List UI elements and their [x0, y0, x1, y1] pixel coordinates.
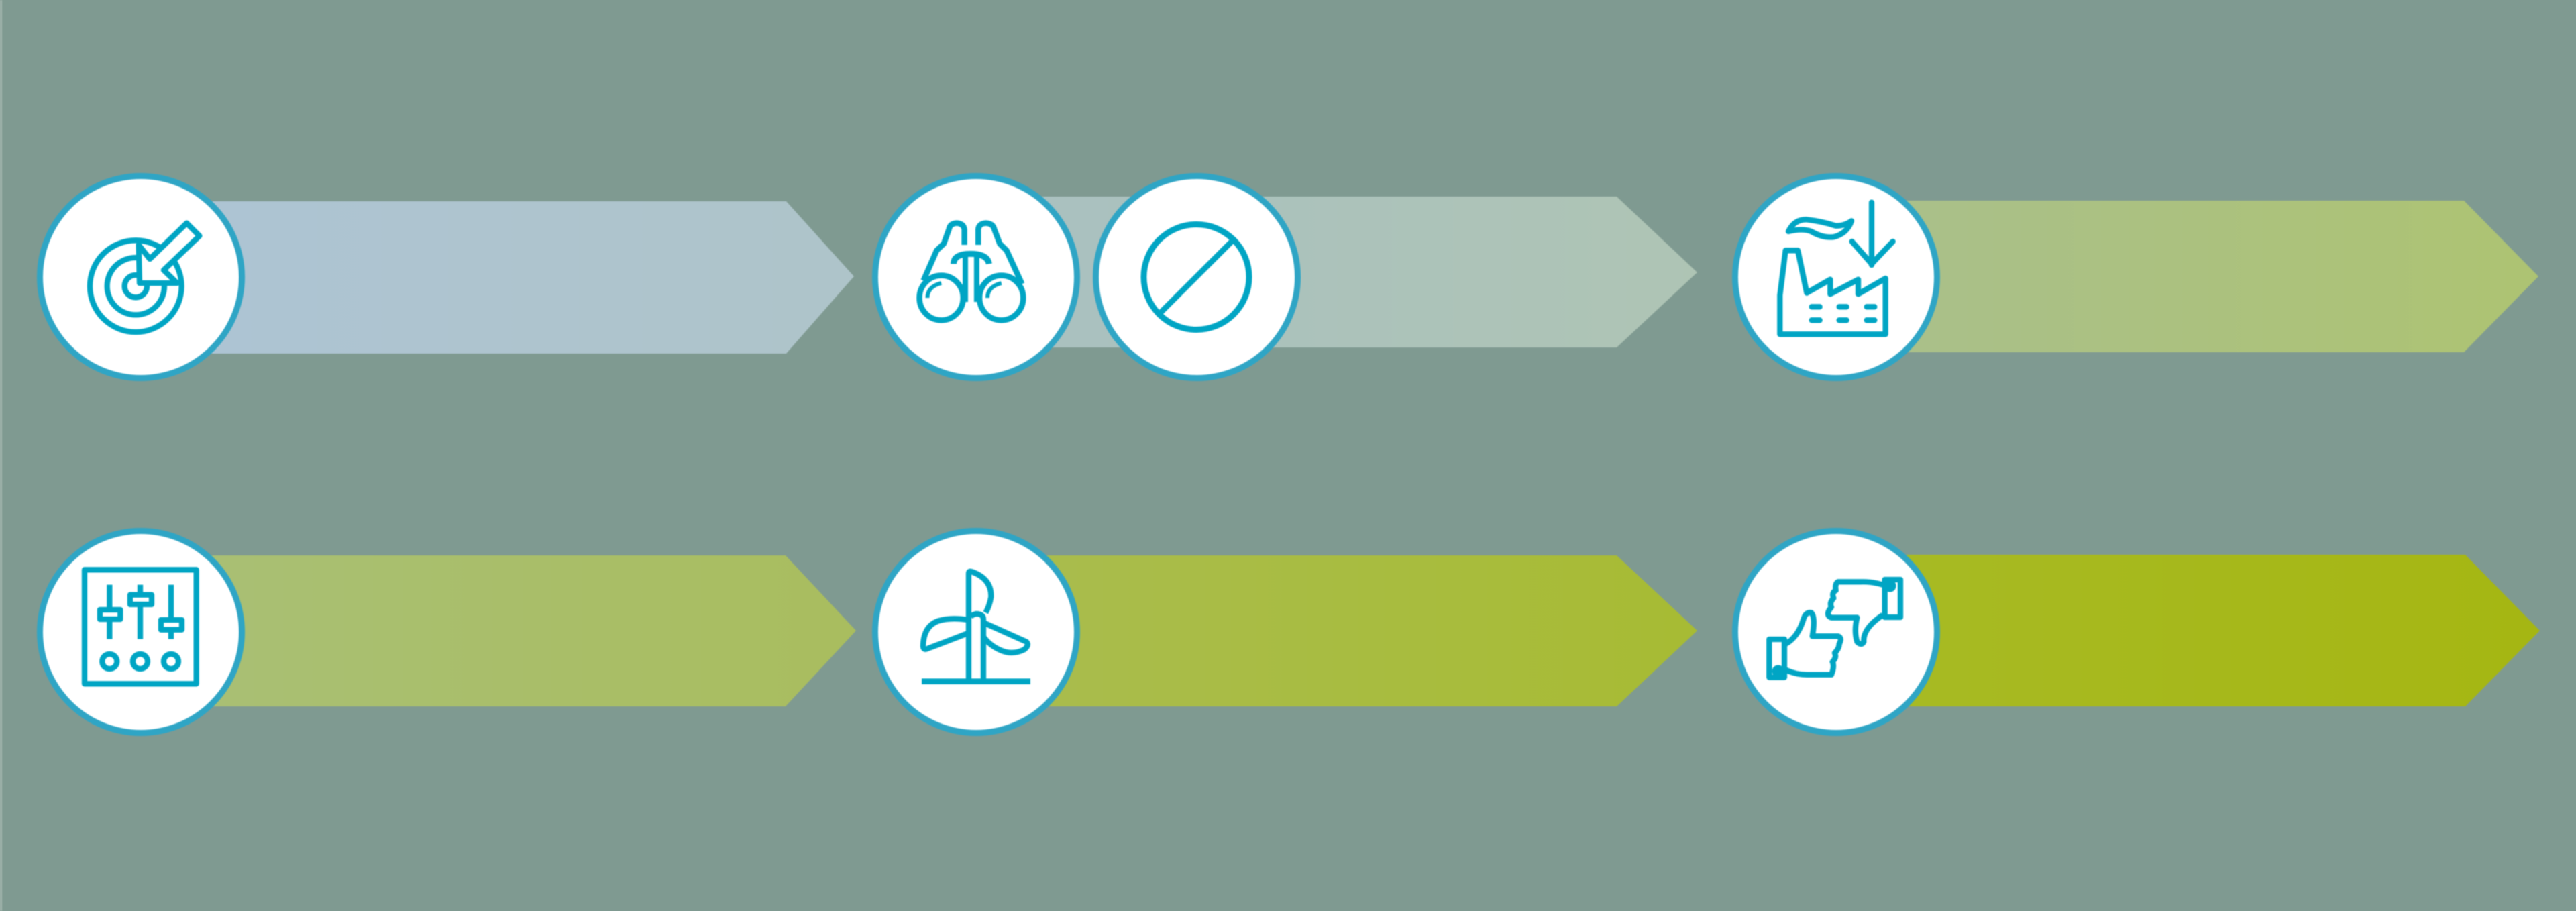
panel: step 2 binoculars and prohibition	[875, 176, 1697, 378]
icon circle: binoculars	[875, 176, 1077, 378]
icon circle: step 3	[1735, 176, 1937, 378]
icon circle: step 4	[40, 531, 241, 733]
panel: step 6 thumbs	[1735, 531, 2540, 733]
arrow: step 5	[1006, 555, 1697, 706]
arrow: step 1	[201, 201, 854, 354]
panel: step 4 controls	[40, 531, 856, 733]
icon: wind turbine	[922, 572, 1030, 682]
icon: factory with down arrow	[1780, 203, 1893, 334]
icon: prohibition sign	[1144, 224, 1249, 330]
arrow: step 3	[1865, 201, 2538, 352]
arrow: step 2	[1006, 197, 1697, 347]
panel: step 3 factory	[1735, 176, 2538, 378]
icon circle: prohibition	[1096, 176, 1297, 378]
icon circle: step 1	[40, 176, 241, 378]
panel: step 5 wind turbine	[875, 531, 1697, 733]
icon circle: step 6	[1735, 531, 1937, 733]
icon: thumbs up and thumbs down	[1769, 580, 1900, 678]
icon: binoculars	[920, 223, 1023, 320]
icon: sliders panel	[85, 570, 197, 684]
arrow: step 6	[1865, 555, 2540, 706]
panel: step 1 target	[40, 176, 854, 378]
arrow: step 4	[201, 555, 856, 706]
icon circle: step 5	[875, 531, 1077, 733]
icon: target with arrow	[90, 223, 199, 332]
